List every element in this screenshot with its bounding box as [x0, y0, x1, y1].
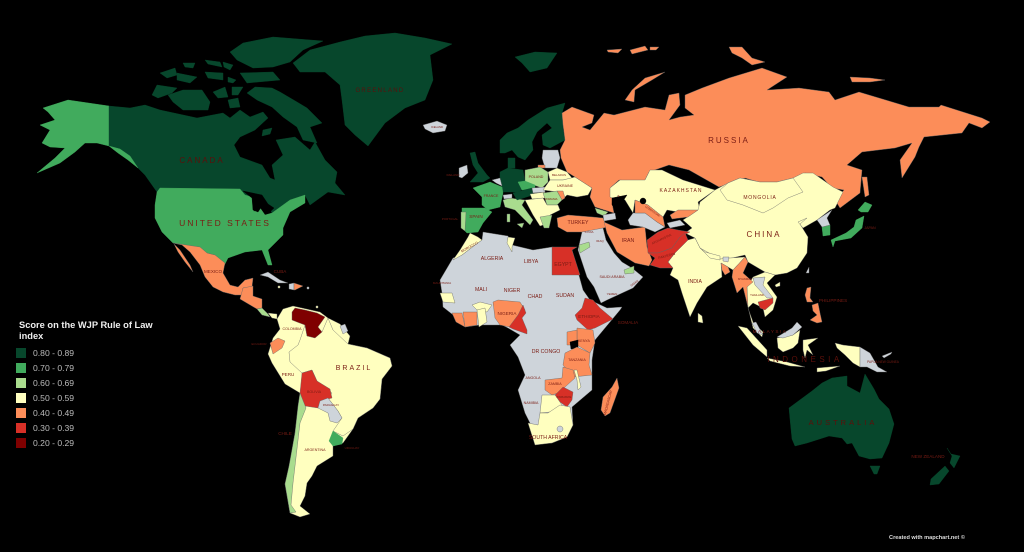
Sardinia — [507, 214, 510, 222]
country labels: UZBEKISTAN — [644, 205, 661, 218]
Senegal — [440, 293, 455, 303]
legend swatches and ranges: 0.30 - 0.39 — [33, 423, 74, 433]
Hungary — [530, 192, 545, 199]
Afghanistan — [647, 228, 690, 253]
Caspian Sea — [612, 195, 628, 228]
Nigeria — [493, 300, 525, 327]
legend — [16, 320, 153, 448]
Belarus — [548, 168, 572, 180]
region: North America — [37, 33, 452, 319]
country labels: COLOMBIA — [283, 327, 302, 331]
country labels: MEXICO — [204, 269, 222, 274]
Zambia — [545, 367, 575, 395]
country labels: YEMEN — [607, 292, 617, 296]
Mongolia — [720, 178, 803, 213]
Uganda — [567, 330, 577, 345]
region: Europe — [459, 52, 592, 233]
country labels: EGYPT — [554, 262, 573, 268]
Iceland — [423, 121, 447, 133]
country labels: LIBYA — [524, 259, 539, 265]
Kenya — [577, 328, 595, 353]
Lesser Sunda Islands — [817, 366, 840, 372]
Azerbaijan and Armenia — [603, 213, 616, 221]
Greenland — [293, 33, 452, 146]
Taiwan — [806, 267, 809, 273]
country labels: IRELAND — [446, 173, 460, 177]
India — [668, 238, 745, 317]
Zimbabwe — [555, 387, 573, 407]
Bhutan — [723, 257, 729, 262]
country labels: MALI — [475, 287, 487, 293]
United States — [155, 188, 305, 266]
France — [473, 182, 503, 210]
Turkmenistan — [628, 213, 665, 232]
country labels: ROMANIA — [544, 197, 558, 201]
Madagascar — [601, 378, 619, 416]
country labels: URUGUAY — [345, 446, 359, 450]
French Guiana — [340, 324, 348, 334]
Puerto Rico — [307, 287, 309, 289]
Kyrgyzstan — [670, 210, 698, 219]
Balkans — [525, 198, 560, 226]
New Britain — [882, 352, 892, 358]
Tunisia — [507, 237, 515, 252]
Italy — [503, 198, 533, 225]
country labels: SAUDI ARABIA — [600, 275, 625, 279]
region: Africa — [440, 232, 622, 445]
country labels: MONGOLIA — [743, 195, 777, 201]
country labels: MYANMAR — [738, 277, 752, 281]
legend swatches and ranges — [16, 348, 74, 448]
country labels: NAMIBIA — [524, 401, 539, 405]
Czechia — [518, 181, 535, 190]
Georgia — [595, 208, 608, 216]
Tanzania — [563, 347, 592, 377]
Ghana — [477, 308, 487, 327]
legend swatches and ranges: 0.20 - 0.29 — [33, 438, 74, 448]
Moldova — [557, 191, 565, 200]
Switzerland — [503, 194, 512, 199]
country labels: CANADA — [179, 156, 225, 165]
Papua — [835, 343, 860, 367]
Laos — [753, 277, 773, 298]
Central America — [240, 286, 262, 309]
country labels: PORTUGAL — [442, 217, 459, 221]
South Korea — [822, 225, 830, 236]
legend swatches and ranges: 0.70 - 0.79 — [33, 363, 74, 373]
Tasmania — [870, 466, 880, 474]
country labels: FRANCE — [484, 194, 499, 198]
North Korea — [817, 210, 832, 227]
country labels: NEW ZEALAND — [911, 454, 945, 459]
Sakhalin — [862, 177, 869, 197]
country labels: KENYA — [578, 339, 591, 343]
country labels: NIGERIA — [498, 311, 517, 316]
South Africa — [528, 405, 573, 445]
Svalbard — [515, 52, 557, 72]
Iran — [604, 222, 652, 266]
Scandinavia — [500, 103, 565, 160]
country labels: SOMALIA — [618, 320, 639, 325]
Ethiopia — [575, 298, 613, 330]
country labels: ARGENTINA — [305, 448, 326, 452]
country labels: INDIA — [688, 279, 702, 285]
legend swatches and ranges: 0.60 - 0.69 — [33, 378, 74, 388]
Canada arctic islands — [152, 37, 323, 143]
country labels: MALAYSIA — [753, 329, 787, 334]
Southeast Asia mainland — [747, 272, 777, 337]
country labels: SPAIN — [469, 214, 483, 219]
Bangladesh — [721, 263, 730, 275]
legend swatches and ranges: 0.40 - 0.49 — [33, 408, 74, 418]
Alaska panhandle — [109, 146, 138, 168]
Denmark — [508, 158, 515, 168]
legend swatches and ranges: 0.80 - 0.89 — [33, 348, 74, 358]
Novaya Zemlya — [625, 72, 665, 102]
Paraguay — [318, 398, 342, 423]
Ecuador — [270, 338, 285, 354]
New Zealand North Island — [947, 448, 960, 468]
country labels: BOLIVIA — [307, 390, 322, 394]
New Zealand South Island — [930, 466, 949, 485]
country labels: CHILE — [278, 431, 292, 436]
country labels: ECUADOR — [251, 342, 267, 346]
Cuba — [260, 272, 288, 283]
Hainan — [775, 282, 780, 287]
country labels: AFGHANISTAN — [651, 233, 672, 245]
Germany — [500, 168, 525, 192]
Benelux — [492, 178, 502, 186]
country labels: GREENLAND — [355, 88, 405, 94]
country labels: UNITED STATES — [179, 218, 271, 228]
Myanmar — [732, 257, 753, 307]
Romania — [543, 191, 562, 205]
country labels: KAZAKHSTAN — [660, 188, 702, 194]
Spain — [462, 208, 492, 233]
country labels: ETHIOPIA — [578, 314, 601, 319]
country labels — [179, 88, 945, 459]
South America base (Brazil, Colombia, Peru, Argentina) — [268, 306, 392, 517]
country labels: POLAND — [529, 175, 544, 179]
Java — [767, 358, 805, 367]
Japan: Hokkaido — [858, 202, 872, 212]
Malawi — [574, 370, 581, 390]
Mexico — [173, 243, 253, 295]
Japan: Honshu — [831, 216, 864, 247]
Ivory Coast — [463, 312, 477, 327]
Great Lakes — [243, 191, 274, 212]
country labels: RUSSIA — [708, 136, 750, 145]
country labels: TANZANIA — [568, 358, 586, 362]
Bolivia — [300, 370, 332, 408]
country labels: ZIMBABWE — [557, 395, 572, 399]
New Siberian Islands — [850, 77, 885, 82]
Poland — [525, 167, 548, 188]
region: Asia — [423, 46, 990, 372]
country labels: TURKEY — [567, 220, 589, 226]
country labels: MOROCCO — [460, 241, 479, 254]
Dominican Republic — [294, 283, 303, 290]
Sicily — [517, 223, 524, 228]
Burkina Faso — [472, 302, 492, 312]
country labels: ALGERIA — [481, 256, 504, 262]
country labels: UKRAINE — [557, 184, 574, 188]
country labels: ZAMBIA — [548, 382, 562, 386]
legend title: Score on the WJP Rule of Law — [19, 320, 153, 330]
country labels: IRAN — [622, 238, 634, 244]
country labels: PAKISTAN — [658, 252, 676, 260]
Franz Josef Land — [607, 46, 659, 54]
country labels: SUDAN — [556, 293, 574, 299]
Tajikistan — [667, 220, 685, 228]
Morocco — [453, 233, 482, 260]
Brazil border — [289, 318, 392, 436]
legend swatches and ranges: 0.50 - 0.59 — [33, 393, 74, 403]
country labels: NIGER — [504, 288, 520, 294]
Philippines: Luzon — [805, 287, 813, 302]
Papua New Guinea — [860, 347, 887, 372]
Sierra Leone and Liberia — [452, 313, 465, 327]
country labels: PAPUA NEW GUINEA — [867, 360, 900, 364]
country labels: MADAGASCAR — [603, 389, 613, 416]
country labels: CHAD — [528, 294, 543, 300]
Chile — [285, 393, 306, 513]
Baltic states — [542, 150, 560, 168]
country labels: CUBA — [274, 269, 287, 274]
country labels: CHINA — [747, 230, 781, 239]
country labels: MAURITANIA — [433, 281, 451, 285]
Sumatra — [738, 326, 767, 357]
Lake Victoria — [570, 340, 578, 349]
Aral Sea — [640, 198, 646, 204]
Canada — [109, 105, 345, 213]
legend title: index — [19, 331, 44, 341]
legend title — [19, 320, 153, 341]
Kaliningrad — [538, 165, 545, 168]
credit: Created with mapchart.net © — [889, 534, 966, 541]
Cambodia — [758, 298, 773, 310]
Alaska — [37, 100, 109, 173]
Venezuela — [292, 308, 325, 338]
Jamaica — [278, 286, 280, 288]
UAE — [624, 266, 634, 274]
Austria — [513, 188, 533, 200]
Costa Rica — [257, 308, 270, 317]
Sri Lanka — [698, 313, 703, 323]
Jordan — [579, 242, 590, 253]
Uruguay — [329, 431, 343, 446]
Portugal — [461, 212, 466, 231]
Slovakia — [532, 187, 545, 193]
Philippines: Mindanao — [810, 303, 822, 323]
Egypt — [552, 247, 580, 275]
China — [683, 173, 843, 275]
country labels: IRAQ — [596, 239, 604, 243]
country labels: PHILIPPINES — [819, 298, 847, 303]
country labels: SYRIA — [584, 230, 594, 234]
Kalimantan — [777, 330, 800, 352]
Africa base — [440, 232, 622, 443]
country labels: PARAGUAY — [323, 403, 339, 407]
Haiti — [289, 283, 294, 290]
Ireland — [459, 165, 468, 178]
Ukraine — [543, 177, 592, 200]
Borneo Malaysia — [777, 322, 802, 338]
Peninsular Malaysia — [752, 322, 763, 335]
country labels: AUSTRALIA — [809, 418, 877, 427]
Arabia and Levant — [578, 228, 643, 303]
region: Oceania — [789, 374, 960, 485]
Russia — [560, 68, 990, 213]
country labels: PERU — [282, 372, 294, 377]
Lesotho — [557, 426, 563, 432]
Botswana — [540, 395, 562, 413]
United Kingdom — [470, 152, 490, 182]
country labels: DR CONGO — [532, 349, 560, 355]
country labels: ICELAND — [431, 125, 443, 129]
Greece — [540, 215, 552, 228]
country labels: ANGOLA — [526, 376, 541, 380]
region: South America — [268, 306, 392, 517]
Pakistan — [648, 233, 688, 268]
Severnaya Zemlya — [729, 47, 765, 65]
Cameroon — [509, 305, 527, 334]
Uzbekistan — [635, 200, 665, 227]
Panama — [268, 313, 277, 319]
country labels: BRAZIL — [336, 365, 372, 372]
country labels: BELARUS — [552, 173, 566, 177]
Baja California — [174, 244, 193, 272]
country labels: THAILAND — [750, 293, 764, 297]
Australia — [789, 374, 894, 459]
country labels: SOUTH AFRICA — [529, 435, 568, 441]
Sulawesi — [803, 338, 818, 358]
Nepal — [700, 248, 720, 260]
Turkey — [557, 215, 607, 232]
Kazakhstan — [610, 170, 715, 217]
country labels: INDONESIA — [767, 355, 843, 364]
country labels: OMAN — [630, 279, 639, 287]
country labels: JAPAN — [864, 226, 876, 230]
Trinidad — [316, 306, 318, 308]
